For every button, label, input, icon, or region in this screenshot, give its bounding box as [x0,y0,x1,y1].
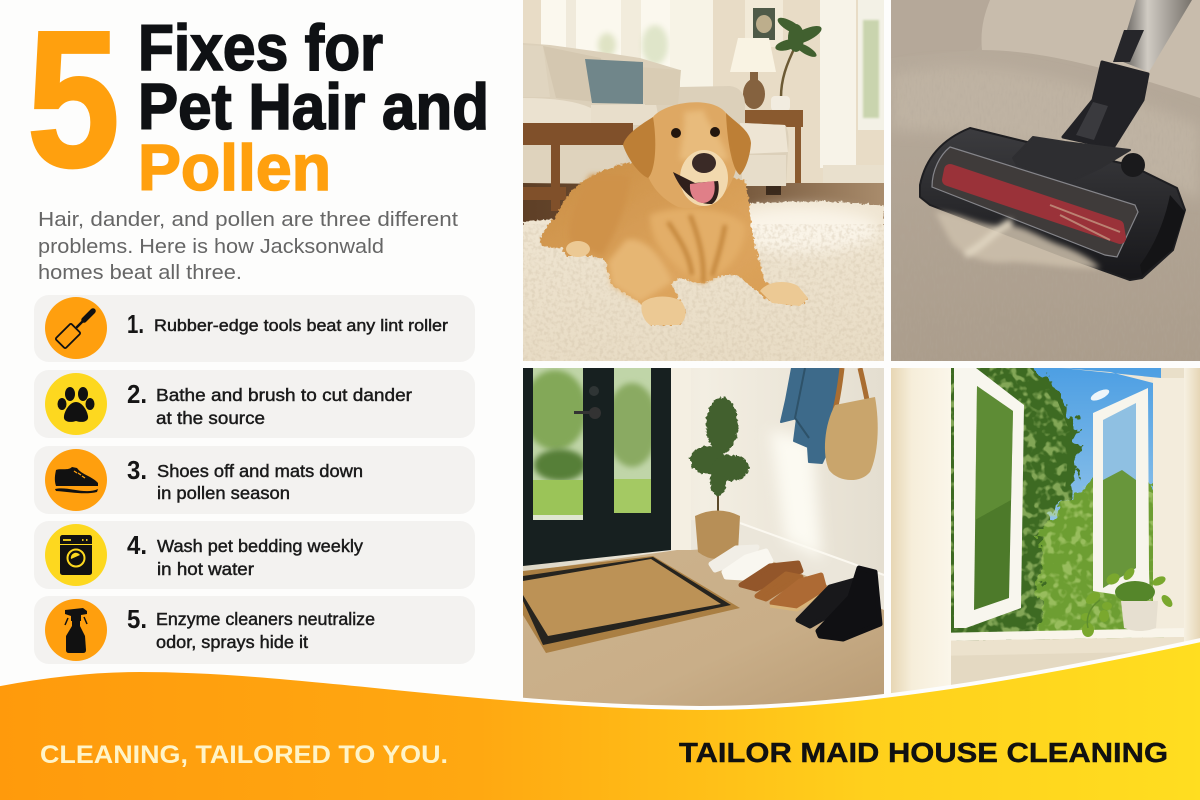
red brush roll [948,170,1120,238]
fix 4 row: Wash pet bedding weekly [157,536,363,556]
dog head [643,102,738,208]
fix 3 row: in pollen season [157,483,290,503]
icon: shoe [55,467,98,493]
icon: rubber-edge tool [55,311,93,349]
open left sash [954,368,1024,628]
fabric seat highlight [895,72,1199,194]
white sneakers [711,547,771,578]
brown shoes [741,563,826,610]
open right sash [1093,388,1150,600]
dog paws [566,241,808,325]
photo: golden retriever on rug [523,0,884,361]
icon: spray bottle [65,608,87,653]
fix 3 row: 3. [127,455,147,485]
fix 5 row [34,596,475,664]
windows and curtains [541,0,884,183]
intro text: Hair, dander, and pollen are three different [38,208,458,231]
photo: entryway with mat and shoes [523,368,884,713]
door [523,368,671,566]
heading line 2: Pet Hair and [138,70,489,143]
dog body [540,162,808,325]
heading line 1: Fixes for [138,11,383,84]
icon: washing machine [60,535,92,575]
potted plant on sill [1081,566,1175,637]
fix 2 row: Bathe and brush to cut dander [156,385,412,405]
potted plant [690,397,749,559]
window sill [934,628,1185,641]
photo: vacuum head on sofa [891,0,1200,361]
fix 4 row: 4. [127,530,147,560]
sun streak [770,430,822,560]
hair pile [935,212,1100,268]
back cushions [891,0,990,58]
fix 1 row [34,295,475,362]
rear shading [576,171,620,259]
vacuum head [920,128,1185,280]
white door trim [677,548,691,550]
side table [745,110,803,187]
sky [936,368,1161,633]
floor [523,183,884,225]
intro text: homes beat all three. [38,261,242,284]
foliage mottling [936,368,1158,633]
vacuum collar and neck [1063,62,1148,148]
photo: open window with trees [891,360,1200,713]
framed picture [745,0,783,47]
chest fur highlight [650,208,745,282]
vacuum tube [1118,0,1192,72]
fix 4 row [34,521,475,589]
heading line 3: Pollen [138,131,331,204]
rug [523,201,884,361]
fix 5 row: odor, sprays hide it [156,632,308,652]
top hub [1016,136,1131,162]
right end cap [1141,195,1185,264]
fix 2 row: at the source [156,408,265,428]
fix 1 row: 1. [127,309,144,339]
trees [925,360,1160,640]
garden view [533,368,583,520]
dark tree mass [925,360,1080,640]
footer tagline: CLEANING, TAILORED TO YOU. [40,741,448,769]
curtains [891,368,951,700]
window frame [1061,368,1161,385]
baseboard [691,545,884,610]
sofa [523,43,789,195]
jacket [781,368,841,463]
fix 3 row: Shoes off and mats down [157,461,363,481]
coffee table [523,123,633,211]
plant and lamp [730,15,824,111]
fix 5 row: 5. [127,604,147,634]
fix 2 row [34,370,475,438]
dog [540,102,808,325]
intro text [38,208,458,284]
clear brush window [932,147,1138,257]
black boots [798,568,880,639]
fix 3 row [34,446,475,514]
footer brand name: TAILOR MAID HOUSE CLEANING [679,737,1168,768]
fix 1 row: Rubber-edge tools beat any lint roller [154,317,449,335]
title block [27,0,489,208]
icon: paw print [58,387,94,422]
coir doormat [523,556,740,653]
footer wave band [0,638,1200,800]
fix 2 row: 2. [127,379,147,409]
intro text: problems. Here is how Jacksonwald [38,235,384,258]
tote bag [825,368,878,480]
fix 4 row: in hot water [157,559,254,579]
floor [523,545,884,713]
bright tree mass [1040,470,1160,640]
fix list [34,295,475,664]
fix 5 row: Enzyme cleaners neutralize [156,609,375,629]
